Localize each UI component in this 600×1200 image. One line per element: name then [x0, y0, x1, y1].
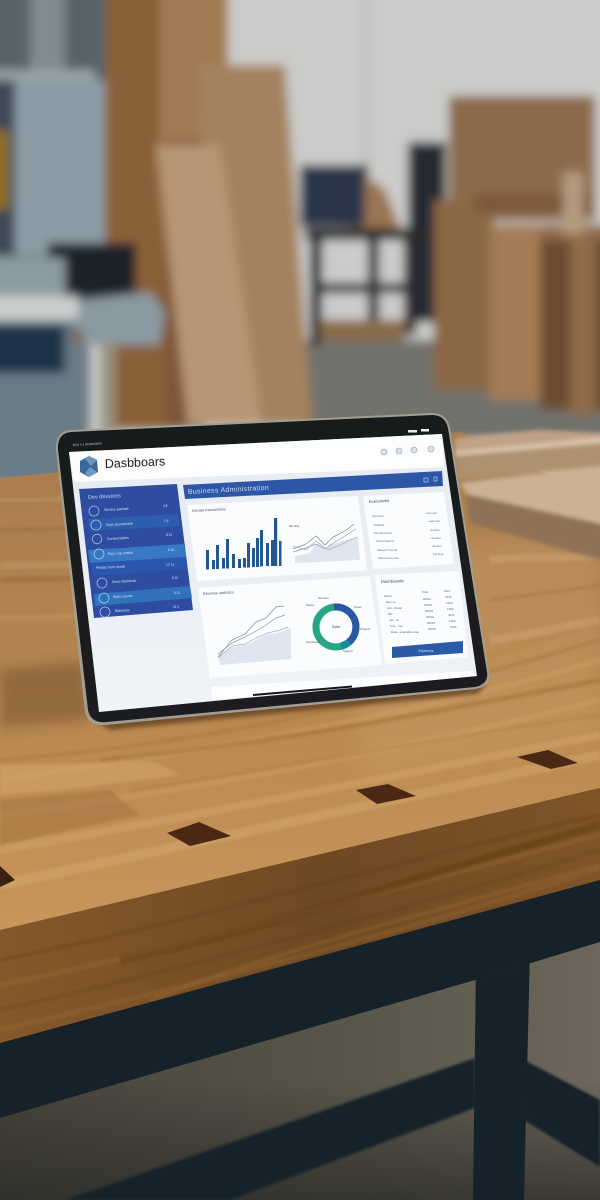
panel: bar and line chart [187, 496, 367, 581]
table rows: 00013 [424, 603, 432, 607]
dark chair and bench in the distance [300, 142, 446, 345]
donut labels: Services [318, 596, 329, 600]
chart title: Denote transactions [192, 507, 226, 513]
machine table and black box [0, 243, 165, 435]
shadow on the table left of the tablet [0, 662, 90, 728]
table rows: Jan - vs [389, 618, 400, 622]
donut labels [306, 596, 371, 653]
tablet bezel [58, 415, 487, 722]
content header icons [424, 477, 437, 482]
table top [0, 432, 600, 930]
list items: - number [430, 544, 442, 548]
table rows [384, 589, 457, 634]
sidebar row labels: Dexo dashboar [112, 579, 137, 584]
top action icons [381, 446, 434, 455]
table rows: Mix [388, 612, 393, 616]
sidebar row values [163, 504, 180, 609]
sidebar row labels: Stalo rsoves [113, 594, 133, 599]
list items [372, 511, 444, 560]
table rows: 00016 [428, 627, 436, 631]
panel: right list [363, 492, 454, 569]
sidebar row labels: Blassoes [115, 608, 130, 613]
floor of the workshop [300, 340, 600, 440]
sidebar row values: 6 12 [174, 591, 180, 595]
donut labels: Overheads [306, 640, 320, 644]
chart legend: Monthly [289, 524, 300, 528]
tablet frame [56, 413, 489, 725]
table rows: Mon vs [386, 600, 396, 604]
panel: bottom right table [375, 571, 468, 664]
table rows: 00042 [426, 615, 434, 619]
machine column on the left [0, 0, 110, 485]
floor shadow [0, 1080, 600, 1200]
donut chart [306, 596, 371, 653]
table rows: 1250 [447, 607, 454, 611]
donut labels: Stores [306, 603, 315, 607]
table heading: Dashboards [381, 578, 404, 584]
list items: - estimate [427, 519, 441, 523]
list items: Selected trends [378, 556, 399, 560]
panel: lower charts [198, 576, 382, 678]
leaning plank, rear [198, 65, 312, 425]
table rows: Line - mix [390, 624, 403, 628]
tablet [56, 413, 489, 725]
list items: Memberships [374, 531, 393, 535]
table rows: Name [384, 594, 392, 598]
line chart small [293, 524, 360, 563]
lower chart title: Revenue statistics [203, 590, 234, 596]
table apron [0, 870, 600, 1118]
table rows: 1240 [446, 601, 453, 605]
table face [0, 788, 600, 1043]
sidebar row icons [89, 506, 110, 617]
logo [80, 456, 98, 477]
sidebar row labels: Consumables [107, 536, 129, 541]
table rows: 00015 [427, 621, 435, 625]
sidebar row values: 01 0 [173, 605, 179, 609]
sidebar row labels: Phiday dust rituals [96, 564, 126, 570]
content header title: Business Administration [188, 485, 269, 496]
tablet screen [69, 434, 477, 712]
table rows: 00012 [423, 597, 431, 601]
sidebar row values: 8 12 [166, 533, 172, 537]
leaning plank, front [156, 145, 262, 425]
header band [69, 434, 444, 482]
table rows: 4120 [448, 613, 455, 617]
donut labels: Support [343, 649, 353, 653]
list items: Subscriptions [376, 539, 395, 543]
dashboard title: Dasbboars [105, 454, 166, 471]
tablet shadow [86, 684, 486, 730]
table rows: 3140 [445, 595, 452, 599]
list items: - Amount [425, 511, 437, 515]
sidebar row values: 1 6 [164, 519, 169, 523]
table rows: Avs - Retail [387, 606, 402, 610]
table rows: 1300 [449, 619, 456, 623]
donut labels: Invest [354, 605, 362, 609]
sidebar row: group [91, 557, 187, 576]
table left rail [65, 1058, 475, 1200]
table rows: 1205 [450, 625, 457, 629]
list items: - number [429, 536, 441, 540]
line chart large [218, 606, 291, 665]
table rows: Sold [444, 589, 450, 593]
sidebar heading: Dev devsions [88, 493, 121, 501]
sidebar panel [79, 484, 193, 618]
right boards on the table [455, 430, 600, 564]
list items: Installed [373, 523, 385, 527]
status bar: BUS 4.1 0000000000 [73, 441, 102, 447]
table leg [473, 950, 530, 1200]
stacked wood frames on the right [434, 96, 600, 415]
list items: Saleout Trends [377, 548, 398, 552]
table rows: Data - acquisition rate [391, 630, 420, 634]
sidebar row labels: Dept sponsorsite [106, 522, 133, 527]
sidebar row labels [96, 507, 137, 613]
sidebar row: active [88, 544, 186, 563]
sidebar row values: 6 10 [168, 548, 174, 552]
table rows: Total [422, 590, 428, 594]
sidebar row: selected 2 [94, 586, 192, 606]
sidebar row: selected 1 [88, 514, 180, 531]
table button: Expences [419, 649, 434, 653]
content header bar [183, 471, 443, 499]
table rows: 00024 [425, 609, 433, 613]
list items: Services [372, 514, 384, 518]
donut labels: Projects [360, 627, 371, 631]
background: blurred workshop [0, 0, 600, 490]
list items: - tracking [431, 552, 444, 556]
table right rail [524, 1060, 600, 1167]
sidebar row values: 12 74 [166, 563, 174, 567]
bottom white strip [211, 671, 477, 700]
list items: - number [428, 528, 440, 532]
donut centre label: Sales [332, 625, 341, 629]
table holes [0, 750, 578, 887]
floor under the table [0, 880, 600, 1200]
sidebar row values: 4 8 [163, 504, 168, 508]
sidebar row labels: Emp nsp status [108, 551, 133, 556]
sidebar row labels: Service partials [104, 507, 129, 512]
home indicator [253, 686, 352, 695]
tall dark planks [105, 0, 228, 430]
list heading: Executives [369, 498, 389, 504]
sidebar row values: 8 10 [172, 576, 178, 580]
bar chart [206, 518, 282, 570]
